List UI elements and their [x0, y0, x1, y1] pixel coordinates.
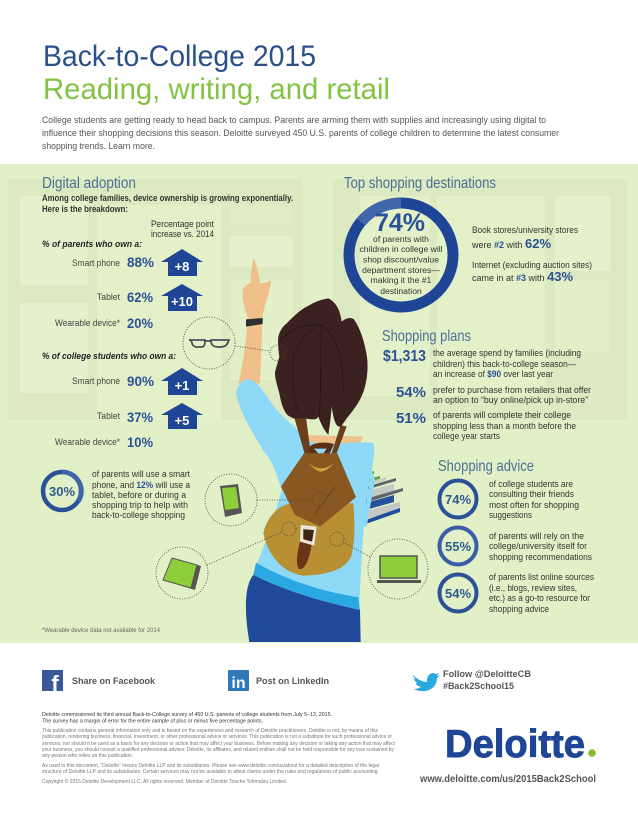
digital adoption intro: Here is the breakdown:	[42, 204, 128, 214]
heading: shopping plans: Shopping plans	[382, 328, 471, 345]
arrow +5: +5	[175, 413, 189, 428]
students: smart phone	[72, 373, 155, 389]
destinations #3	[472, 260, 592, 284]
arrow +10	[161, 284, 203, 311]
ring: 74%: of parents with	[373, 234, 429, 244]
column label: percentage point increase	[151, 219, 214, 239]
icon: facebook: f	[51, 671, 59, 696]
students: wearable	[55, 434, 154, 450]
heading: top shopping destinations: Top shopping destinations	[344, 175, 496, 192]
disclaimer: This publication contains general information only and is based on the experiences and research of Deloitte practitioners. Deloitte is not, by means of this	[42, 728, 378, 734]
students: wearable: Wearable device*	[55, 437, 120, 447]
parents: wearable: 20%	[127, 315, 154, 331]
title: Reading, writing, and retail	[43, 73, 390, 106]
heading: shopping advice: Shopping advice	[438, 458, 534, 475]
title	[43, 40, 390, 106]
advice: 55%	[440, 528, 592, 564]
callout: glasses	[183, 317, 286, 369]
advice: 74%: of college students are	[489, 479, 573, 489]
digital adoption intro: Among college families, device ownership is growing exponentially.	[42, 193, 293, 203]
destinations #2: Book stores/university stores	[472, 225, 578, 235]
icon: linkedin	[228, 670, 249, 692]
students subheading: % of college students who own a:	[42, 351, 176, 361]
ring: 74%: making it the #1	[371, 275, 432, 285]
ring: 74%	[349, 203, 453, 307]
advice: 55%: college/university itself for	[489, 541, 587, 551]
column label: percentage point increase: increase vs. 2014	[151, 229, 214, 239]
footnote: *Wearable device data not available for 2014	[42, 627, 160, 634]
follow text: #Back2School15	[443, 681, 515, 692]
disclaimer: publication, rendering business, financial, investment, or other professional advice or services. This publication is not a substitute for such professional advice or	[42, 734, 392, 740]
deloitte logo: Deloitte	[445, 723, 585, 766]
arrow +10: +10	[171, 294, 193, 309]
parents: smart phone	[72, 254, 155, 270]
disclaimer: As used in this document, “Deloitte” means Deloitte LLP and its subsidiaries. Please see www.deloitte.com/us/about for a detailed description of the legal	[42, 763, 379, 769]
plan: $1,313: an increase of $90 over last year	[433, 369, 553, 379]
advice: 74%: consulting their friends	[489, 489, 574, 499]
disclaimer: Copyright © 2015 Deloitte Development LLC. All rights reserved. Member of Deloitte Touche Tohmatsu Limited.	[42, 778, 287, 785]
students: tablet	[97, 409, 154, 425]
intro text: shopping trends. Learn more.	[42, 141, 155, 151]
share on facebook: Share on Facebook	[72, 676, 156, 687]
plan: 51%	[396, 410, 576, 441]
parents: smart phone: 88%	[127, 254, 155, 270]
disclaimer: any person who relies on this publication.	[42, 753, 133, 759]
website url: www.deloitte.com/us/2015Back2School	[419, 773, 596, 785]
icon: twitter	[413, 673, 440, 691]
advice: 74%: most often for shopping	[489, 500, 579, 510]
ring: 74%: destination	[380, 286, 422, 296]
ring: 74%: 74%	[375, 209, 425, 237]
advice: 54%: etc.) as a go-to resource for	[489, 593, 590, 603]
ring: 74%: children in college will	[359, 244, 443, 254]
30% description: of parents will use a smart	[92, 469, 190, 479]
destinations #3: Internet (excluding auction sites)	[472, 260, 592, 270]
follow text	[443, 669, 531, 692]
plan: $1,313: $1,313	[383, 348, 426, 365]
advice: 54%: 54%	[445, 586, 471, 601]
woman illustration	[236, 258, 375, 642]
destinations #2	[471, 225, 578, 251]
plan: 51%: 51%	[396, 410, 426, 427]
parents: tablet: 62%	[127, 289, 154, 305]
students: smart phone: 90%	[127, 373, 155, 389]
heading: digital adoption: Digital adoption	[42, 175, 136, 192]
advice: 54%: shopping advice	[489, 604, 549, 614]
30% description: tablet, before or during a	[92, 490, 186, 500]
background panel	[0, 164, 638, 643]
follow text: Follow @DeloitteCB	[443, 669, 531, 680]
callout: phone	[205, 474, 326, 526]
plan: $1,313: children) this back-to-college season—	[433, 359, 576, 369]
arrow +1	[161, 368, 203, 395]
ring: 74%: department stores—	[362, 265, 440, 275]
plan: $1,313: the average spend by families (including	[433, 348, 581, 358]
plan: 51%: of parents will complete their college	[433, 410, 571, 420]
plan: 54%	[396, 384, 591, 405]
post on linkedin: Post on LinkedIn	[256, 676, 329, 687]
advice: 55%: 55%	[445, 539, 471, 554]
title: Back-to-College 2015	[43, 40, 316, 73]
30% description	[92, 469, 190, 520]
ring: 30%	[43, 472, 82, 510]
30% description: back-to-college shopping	[92, 510, 185, 520]
disclaimer	[42, 728, 395, 785]
intro text: College students are getting ready to head back to campus. Parents are arming them with supplies and increasingly using digital to	[42, 115, 546, 125]
plan: $1,313	[383, 348, 581, 379]
icon: linkedin: in	[231, 675, 246, 692]
survey note: The survey has a margin of error for the entire sample of plus or minus five percentage points.	[42, 718, 263, 724]
students: tablet: 37%	[127, 409, 154, 425]
disclaimer: structure of Deloitte LLP and its subsidiaries. Certain services may not be available to attest clients under the rules and regulations of public accounting.	[42, 769, 379, 775]
plan: 54%: prefer to purchase from retailers that offer	[433, 385, 591, 395]
30% description: phone, and 12% will use a	[92, 480, 190, 490]
arrow +8: +8	[175, 259, 189, 274]
callout: laptop	[330, 532, 428, 599]
parents: wearable	[55, 315, 154, 331]
plan: 54%: an option to “buy online/pick up in-store”	[433, 395, 588, 405]
arrow +1: +1	[175, 378, 189, 393]
advice: 74%	[440, 479, 579, 520]
survey note: Deloitte commissioned its third annual Back-to-College survey of 450 U.S. parents of college students from July 5–13, 2015.	[42, 712, 332, 718]
plan: 51%: shopping less than a month before the	[433, 421, 576, 431]
advice: 54%: (i.e., blogs, review sites,	[489, 583, 577, 593]
books	[360, 471, 403, 526]
advice: 55%: shopping recommendations	[489, 552, 592, 562]
disclaimer: your business, you should consult a qualified professional advisor. Deloitte, its affiliates, and related entities shall not be held responsible for any loss sustained by	[42, 747, 394, 753]
arrow +8	[161, 249, 203, 276]
30% description: shopping trip to help with	[92, 500, 188, 510]
disclaimer: services, nor should it be used as a basis for any decision or action that may affect your business. Before making any decision or taking any action that may affect	[42, 741, 395, 747]
intro text: influence their shopping decisions this season. Deloitte surveyed 450 U.S. parents of college children to determine the latest consumer	[42, 128, 559, 138]
ring: 74%: shop discount/value	[363, 254, 439, 264]
icon: facebook	[42, 670, 63, 696]
arrow +5	[161, 403, 203, 429]
destinations #2: were #2 with 62%	[471, 236, 552, 251]
students: smart phone: Smart phone	[72, 376, 120, 386]
advice: 54%: of parents list online sources	[489, 572, 594, 582]
column label: percentage point increase: Percentage point	[151, 219, 214, 229]
parents: smart phone: Smart phone	[72, 258, 120, 268]
parents subheading: % of parents who own a:	[42, 239, 142, 249]
advice: 74%: 74%	[445, 492, 471, 507]
digital adoption intro	[42, 193, 293, 214]
advice: 55%: of parents will rely on the	[489, 531, 584, 541]
callout: tablet	[156, 522, 296, 599]
students: tablet: Tablet	[97, 411, 120, 421]
students: wearable: 10%	[127, 434, 154, 450]
advice: 54%	[440, 572, 594, 614]
parents: tablet	[97, 289, 154, 305]
destinations #3: came in at #3 with 43%	[472, 269, 574, 284]
plan: 51%: college year starts	[433, 431, 500, 441]
intro text	[42, 115, 559, 151]
parents: wearable: Wearable device*	[55, 318, 120, 328]
parents: tablet: Tablet	[97, 292, 120, 302]
advice: 74%: suggestions	[489, 510, 532, 520]
survey note	[42, 712, 332, 724]
ring: 30%: 30%	[49, 484, 75, 499]
plan: 54%: 54%	[396, 384, 426, 401]
